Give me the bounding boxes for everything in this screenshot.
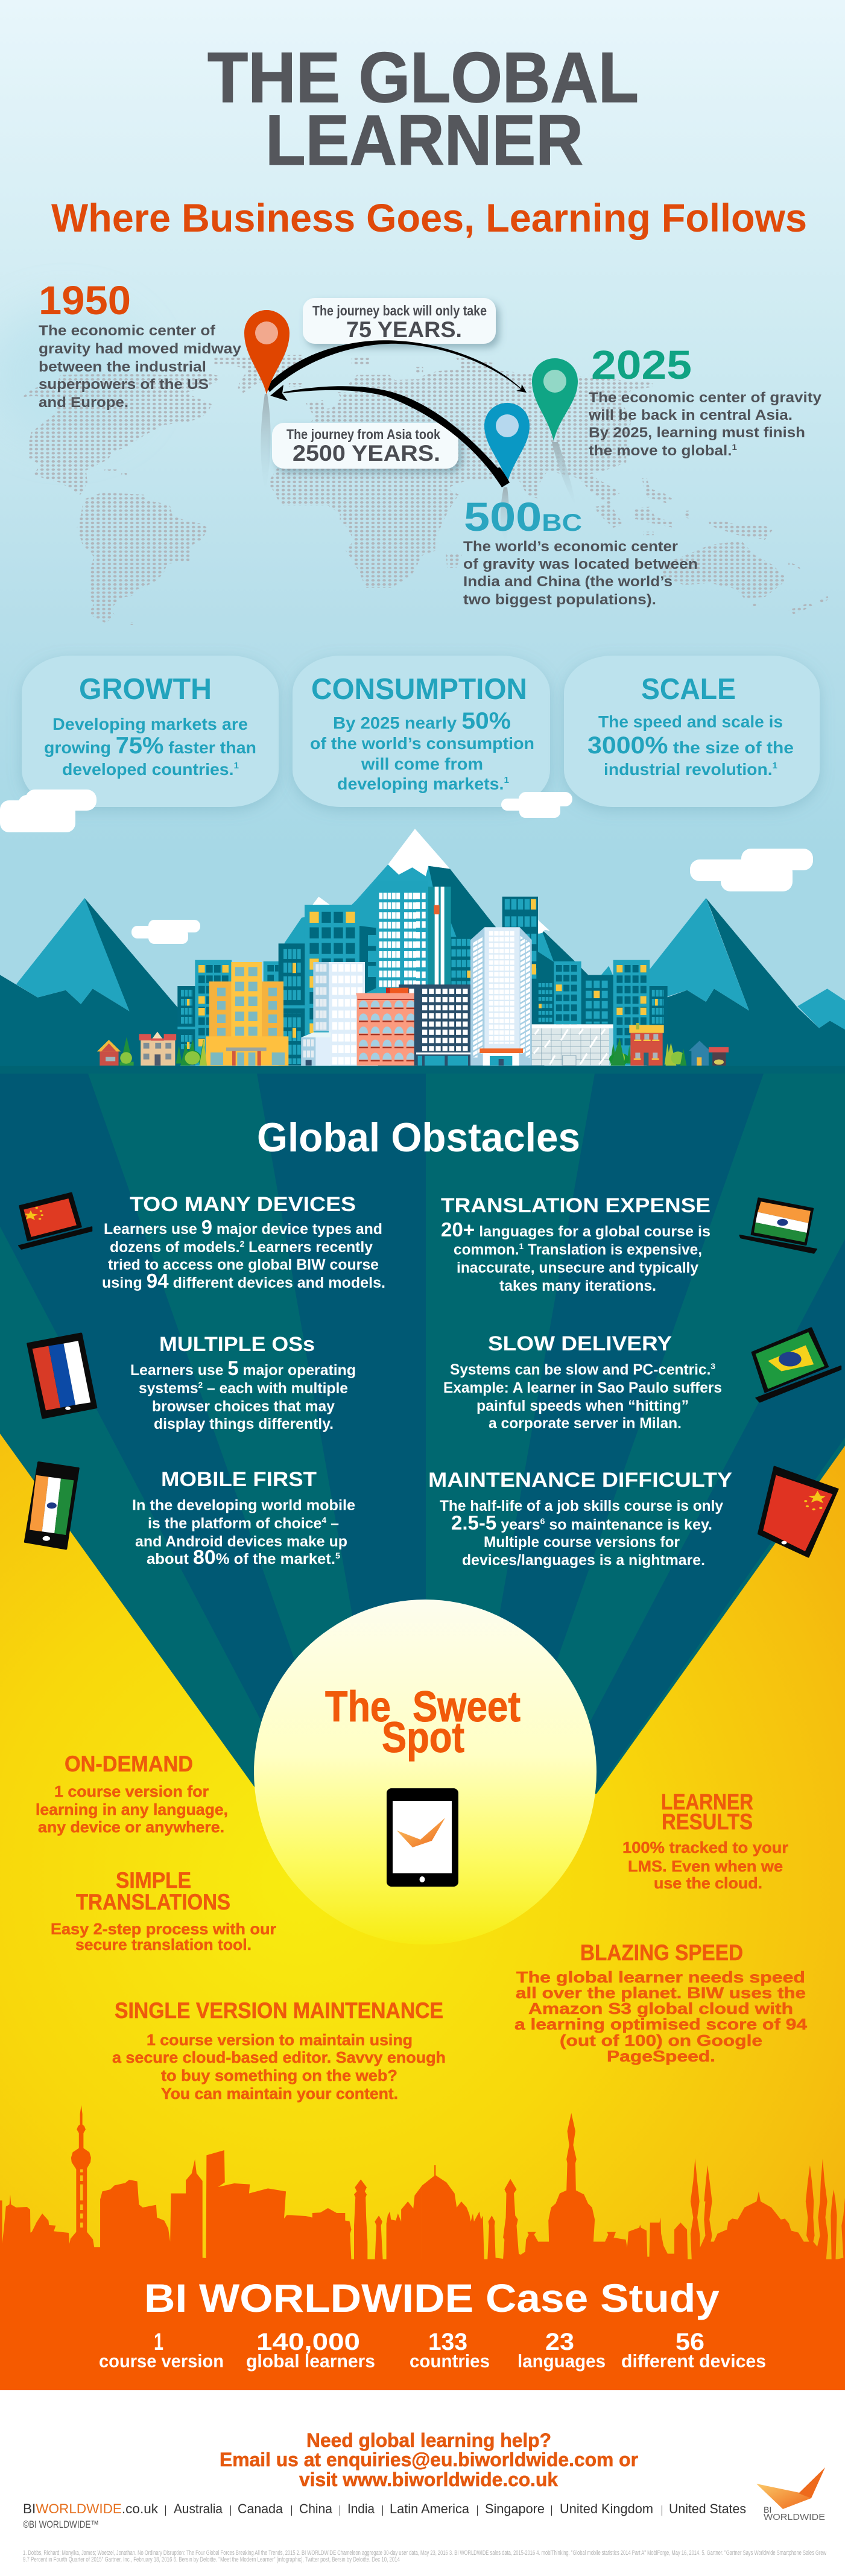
icon: Russia tablet (28, 1334, 96, 1418)
sweet spot: simple translations: SIMPLE (116, 1868, 191, 1893)
text: 2025: the move to global. (589, 443, 721, 459)
stat: languages: languages (517, 2350, 606, 2372)
clouds (0, 790, 813, 944)
obstacle: too many devices: dozens of models. (110, 1239, 241, 1256)
callout: 2500 years: The journey from Asia took (286, 426, 440, 442)
text: 1950: 1950 (39, 278, 131, 323)
sweet spot: learner results: LMS. Even when we (628, 1857, 783, 1875)
panel: scale: The speed and scale is (598, 712, 783, 731)
text: 1950: The economic center of (39, 323, 216, 339)
footer: country links: Latin America (390, 2501, 470, 2516)
house: left tan (139, 1031, 176, 1066)
background: white footer (0, 2390, 845, 2576)
icon: Brazil laptop (752, 1328, 841, 1402)
obstacle: too many devices: Learners use 9 major device types and (104, 1216, 382, 1238)
obstacle: translation expense: 20+ languages for a global course is (441, 1218, 710, 1241)
left mountain (0, 898, 180, 1069)
panel: growth: developed countries. (62, 760, 231, 779)
sweet spot: on-demand: 1 course version for (54, 1782, 209, 1800)
arrow end over blue pin (492, 467, 510, 487)
sweet spot: blazing speed: Amazon S3 global cloud with (528, 1999, 793, 2017)
footnotes: 9.7 Percent in Fourth Quarter of 2015" Gartner, Inc., February 18, 2016 6. Bersin by Deloitte. "Meet the Modern Learner" [infographic], Twitter post, Bersin by Deloitte. Dec 10, 2014 (23, 2556, 400, 2563)
stat: global learners: global learners (246, 2350, 375, 2372)
sweet spot: single version maintenance: 1 course version to maintain using (147, 2031, 413, 2049)
obstacle: too many devices: tried to access one global BIW course (108, 1256, 379, 1273)
footnotes (23, 2549, 826, 2563)
obstacle: translation expense: common. (454, 1241, 521, 1258)
footer: country links: BIWORLDWIDE.co.uk (23, 2501, 159, 2516)
right mountain (641, 898, 845, 1069)
mountains (0, 829, 845, 1069)
panel: growth: GROWTH (79, 673, 212, 706)
sweet spot: simple translations: Easy 2-step process with our (51, 1920, 276, 1938)
obstacle: maintenance difficulty: MAINTENANCE DIFFICULTY (428, 1469, 732, 1492)
heading: The Sweet Spot: Sweet (413, 1683, 521, 1731)
obstacle: translation expense: Translation is expensive, (524, 1241, 702, 1258)
logo: BI Worldwide: BI (764, 2505, 771, 2514)
small houses (97, 1031, 729, 1066)
obstacle: slow delivery: a corporate server in Milan. (489, 1415, 682, 1432)
logo: BI Worldwide (756, 2467, 825, 2522)
panel: growth: growing 75% faster than (44, 733, 256, 759)
stat: course version: course version (99, 2350, 224, 2372)
text: 1950: and Europe. (39, 394, 128, 411)
panel: consumption: of the world’s consumption (310, 734, 534, 753)
callout: 75 years: 75 YEARS. (346, 317, 462, 342)
footer: country links: China (299, 2501, 333, 2516)
call to action: Need global learning help? (306, 2429, 551, 2451)
salmon building (356, 988, 418, 1066)
stat: countries (410, 2329, 490, 2372)
obstacle: multiple OSs: browser choices that may (152, 1398, 335, 1415)
title (207, 38, 639, 180)
stat: languages: 23 (545, 2329, 574, 2355)
callout: 2500 years: 2500 YEARS. (293, 441, 440, 466)
obstacle: maintenance difficulty: Multiple course versions for (484, 1534, 680, 1551)
glass building (532, 1024, 613, 1066)
stat: countries: 133 (428, 2329, 467, 2355)
obstacle: maintenance difficulty: so maintenance is key. (545, 1516, 712, 1533)
background: sky (0, 0, 845, 1080)
text: 500 BC: 500 BC (464, 495, 582, 540)
sweet spot: learner results: RESULTS (662, 1809, 753, 1834)
sweet spot: blazing speed: The global learner needs speed (516, 1968, 805, 1986)
arrow: journey from Europe back to Asia (266, 340, 527, 393)
dark tower (264, 943, 305, 1066)
sweet spot: single version maintenance: You can maintain your content. (161, 2084, 398, 2103)
obstacle: slow delivery: Example: A learner in Sao Paulo suffers (443, 1379, 722, 1396)
sweet spot: single version maintenance: to buy something on the web? (161, 2066, 397, 2084)
obstacle: maintenance difficulty (428, 1469, 732, 1569)
sweet spot: simple translations (51, 1868, 276, 1954)
obstacle: mobile first: about 80% of the market. (147, 1546, 332, 1568)
heading: The Sweet Spot: The (325, 1683, 391, 1731)
call to action: visit www.biworldwide.co.uk (299, 2469, 558, 2490)
navy office (414, 984, 471, 1066)
obstacle: translation expense: takes many iterations. (499, 1277, 656, 1294)
obstacle: translation expense (441, 1194, 710, 1294)
navy office left part (399, 984, 425, 1066)
obstacle: translation expense: 1 (519, 1241, 524, 1251)
sweet spot: simple translations: secure translation tool. (75, 1935, 252, 1954)
text: 1950: between the industrial (39, 359, 206, 375)
obstacle: mobile first: and Android devices make up (135, 1533, 347, 1550)
icon: orange pin (244, 310, 290, 394)
panel: scale (564, 656, 820, 807)
icon: China laptop (19, 1193, 92, 1249)
obstacle: too many devices: Learners recently (244, 1239, 373, 1256)
obstacle: too many devices (102, 1193, 385, 1292)
sweet spot: single version maintenance: a secure cloud-based editor. Savvy enough (112, 2048, 446, 2066)
obstacle: maintenance difficulty: The half-life of a job skills course is only (440, 1498, 723, 1514)
arrow: journey from Asia to Europe (270, 385, 510, 487)
device icons (19, 1193, 841, 1557)
subtitle: Where Business Goes, Learning Follows (51, 195, 807, 240)
icon: blue pin (484, 403, 530, 484)
footer: country links: Singapore (485, 2501, 545, 2516)
stat: course version (99, 2329, 224, 2372)
stat: languages (517, 2329, 606, 2372)
dotted world map (18, 350, 832, 633)
obstacle: translation expense: TRANSLATION EXPENSE (441, 1194, 710, 1217)
obstacle: mobile first: 4 (321, 1515, 326, 1525)
callout: 75 years (303, 298, 496, 344)
mountain ridge and right teal buildings (416, 881, 668, 1066)
house: left red (97, 1037, 134, 1066)
sweet spot: on-demand (36, 1752, 228, 1836)
panel: scale: 3000% the size of the (587, 732, 794, 759)
footer: country links: Canada (238, 2501, 283, 2516)
text: 500 BC: The world’s economic center (463, 539, 678, 555)
sweet spot: learner results (622, 1790, 788, 1892)
panel: scale: 1 (773, 761, 777, 771)
obstacle: mobile first (132, 1468, 355, 1568)
obstacle: mobile first: In the developing world mobile (132, 1497, 355, 1514)
orange case study band (0, 2259, 845, 2390)
obstacle: mobile first: is the platform of choice (148, 1515, 322, 1532)
panel: consumption: CONSUMPTION (311, 673, 527, 706)
sweet spot: blazing speed: (out of 100) on Google (560, 2031, 762, 2049)
text: 2025: 1 (732, 442, 737, 452)
text: 500 BC: two biggest populations). (463, 592, 656, 608)
panel: world map timeline (0, 278, 832, 633)
sweet spot: on-demand: learning in any language, (36, 1800, 228, 1818)
obstacle: too many devices: using 94 different devices and models. (102, 1270, 385, 1292)
icon: tablet with BI logo (387, 1788, 458, 1887)
sweet spot: simple translations: TRANSLATIONS (76, 1890, 230, 1914)
pin shadows (261, 394, 576, 543)
panel: consumption: developing markets. (337, 774, 501, 793)
tree group right (610, 1039, 686, 1066)
stat: different devices: different devices (621, 2350, 766, 2372)
stat: global learners (246, 2329, 375, 2372)
panel: consumption: will come from (361, 755, 483, 773)
sweet spot: on-demand: any device or anywhere. (38, 1818, 224, 1836)
sweet spot: learner results: 100% tracked to your (622, 1838, 788, 1856)
text: 2025 (588, 343, 822, 459)
stat: global learners: 140,000 (256, 2329, 360, 2355)
sweet spot: blazing speed: BLAZING SPEED (580, 1940, 743, 1965)
footer: copyright: ©BI WORLDWIDE™ (23, 2519, 99, 2530)
footer: country links: United Kingdom (560, 2501, 653, 2516)
heading: Global Obstacles: Global Obstacles (257, 1115, 580, 1160)
text: 500 BC: of gravity was located between (463, 556, 698, 572)
title: THE GLOBAL (207, 38, 639, 118)
text: 500 BC: India and China (the world’s (463, 574, 673, 590)
panel: growth: Developing markets are (52, 715, 248, 733)
panel: global obstacles background (0, 1066, 845, 1794)
obstacle: slow delivery: Systems can be slow and PC-centric. (450, 1361, 717, 1378)
heading: case study: BI WORLDWIDE Case Study (144, 2276, 720, 2320)
obstacle: maintenance difficulty: 6 (540, 1516, 545, 1526)
red house (629, 1023, 664, 1066)
obstacle: multiple OSs (130, 1333, 356, 1432)
house: right blue (689, 1040, 729, 1066)
obstacle: mobile first: 5 (335, 1551, 340, 1560)
far left buildings (177, 960, 232, 1066)
tree group left (180, 1040, 207, 1066)
callout: 75 years: The journey back will only take (312, 303, 487, 318)
footer: country links (23, 2501, 746, 2516)
text: 1950: superpowers of the US (39, 376, 209, 393)
sweet spot: on-demand: ON-DEMAND (65, 1752, 193, 1776)
text: 2025: 2025 (591, 343, 692, 388)
background: yellow sunburst (0, 1387, 845, 2292)
footer: country links: United States (669, 2501, 746, 2516)
logo: BI Worldwide: WORLDWIDE (764, 2512, 825, 2522)
city: left half (176, 881, 425, 1066)
teal office with yellow windows (305, 905, 376, 1066)
panel: growth: 1 (234, 761, 239, 771)
text: 2025: will be back in central Asia. (588, 407, 793, 423)
sweet spot: blazing speed: a learning optimised score of 94 (514, 2015, 808, 2033)
obstacle: mobile first: MOBILE FIRST (161, 1468, 317, 1491)
tall tower (376, 881, 424, 989)
panel: consumption: By 2025 nearly 50% (333, 708, 511, 734)
heading: The Sweet Spot: Spot (382, 1714, 464, 1762)
sweet spot: blazing speed: all over the planet. BIW uses the (516, 1984, 806, 2002)
obstacle: too many devices: 2 (239, 1239, 244, 1248)
icon: India laptop (740, 1198, 817, 1253)
orange skyline (0, 2105, 845, 2268)
footer: country links: India (347, 2501, 375, 2516)
stat: countries: countries (410, 2350, 490, 2372)
text: 2025: By 2025, learning must finish (589, 425, 805, 441)
left trees (176, 1039, 206, 1065)
stat: different devices: 56 (676, 2329, 704, 2355)
panel: consumption: 1 (504, 775, 509, 785)
call to action: Email us at enquiries@eu.biworldwide.com or (220, 2449, 638, 2470)
obstacle: slow delivery (443, 1332, 722, 1432)
panel: growth (22, 656, 279, 807)
title: LEARNER (265, 101, 583, 180)
obstacle: multiple OSs: systems (139, 1380, 199, 1397)
stat: course version: 1 (154, 2329, 163, 2355)
obstacle: too many devices: TOO MANY DEVICES (130, 1193, 356, 1216)
text: 500 BC (463, 495, 698, 608)
obstacle: multiple OSs: Learners use 5 major operating (130, 1357, 356, 1379)
obstacle: slow delivery: SLOW DELIVERY (488, 1332, 672, 1355)
text: 1950 (39, 278, 242, 411)
obstacle: multiple OSs: 2 (198, 1380, 203, 1390)
sweet spot: learner results: use the cloud. (654, 1874, 762, 1892)
callout: 2500 years (272, 423, 458, 469)
footer: country links: Australia (174, 2501, 223, 2516)
obstacle: translation expense: inaccurate, unsecure and typically (457, 1259, 698, 1276)
obstacle: slow delivery: 3 (710, 1361, 715, 1371)
panel: consumption (293, 656, 550, 807)
sweet spot: blazing speed (514, 1940, 808, 2065)
sweet spot: blazing speed: PageSpeed. (607, 2047, 715, 2065)
text: 2025: The economic center of gravity (589, 390, 822, 406)
obstacle: slow delivery: painful speeds when “hitting” (476, 1397, 689, 1414)
heading: The Sweet Spot (325, 1683, 521, 1762)
obstacle: multiple OSs: display things differently. (154, 1416, 334, 1432)
icon: China tablet (758, 1466, 838, 1557)
city: right half (414, 881, 671, 1066)
obstacle: multiple OSs: – each with multiple (203, 1380, 348, 1397)
obstacle: mobile first: – (326, 1515, 339, 1532)
text: 1950: gravity had moved midway (39, 341, 242, 357)
sweet spot: single version maintenance (112, 1998, 446, 2103)
white tower (470, 927, 532, 1066)
icon: green pin (532, 358, 578, 441)
call to action (220, 2429, 638, 2490)
icon: India phone (25, 1463, 78, 1549)
white and blue building (301, 962, 365, 1066)
right trees (609, 1037, 671, 1065)
panel: scale: industrial revolution. (604, 760, 771, 779)
yellow hotel (206, 962, 288, 1066)
obstacle: maintenance difficulty: devices/languages is a nightmare. (462, 1552, 705, 1569)
panel: sweet spot circle (254, 1600, 597, 1945)
central mountain (280, 829, 544, 1069)
panel: scale: SCALE (641, 673, 736, 706)
sweet spot: learner results: LEARNER (661, 1790, 753, 1814)
sweet spot: single version maintenance: SINGLE VERSION MAINTENANCE (115, 1998, 443, 2023)
stat: different devices (621, 2329, 766, 2372)
obstacle: maintenance difficulty: 2.5-5 years (451, 1511, 540, 1534)
obstacle: multiple OSs: MULTIPLE OSs (159, 1333, 315, 1356)
